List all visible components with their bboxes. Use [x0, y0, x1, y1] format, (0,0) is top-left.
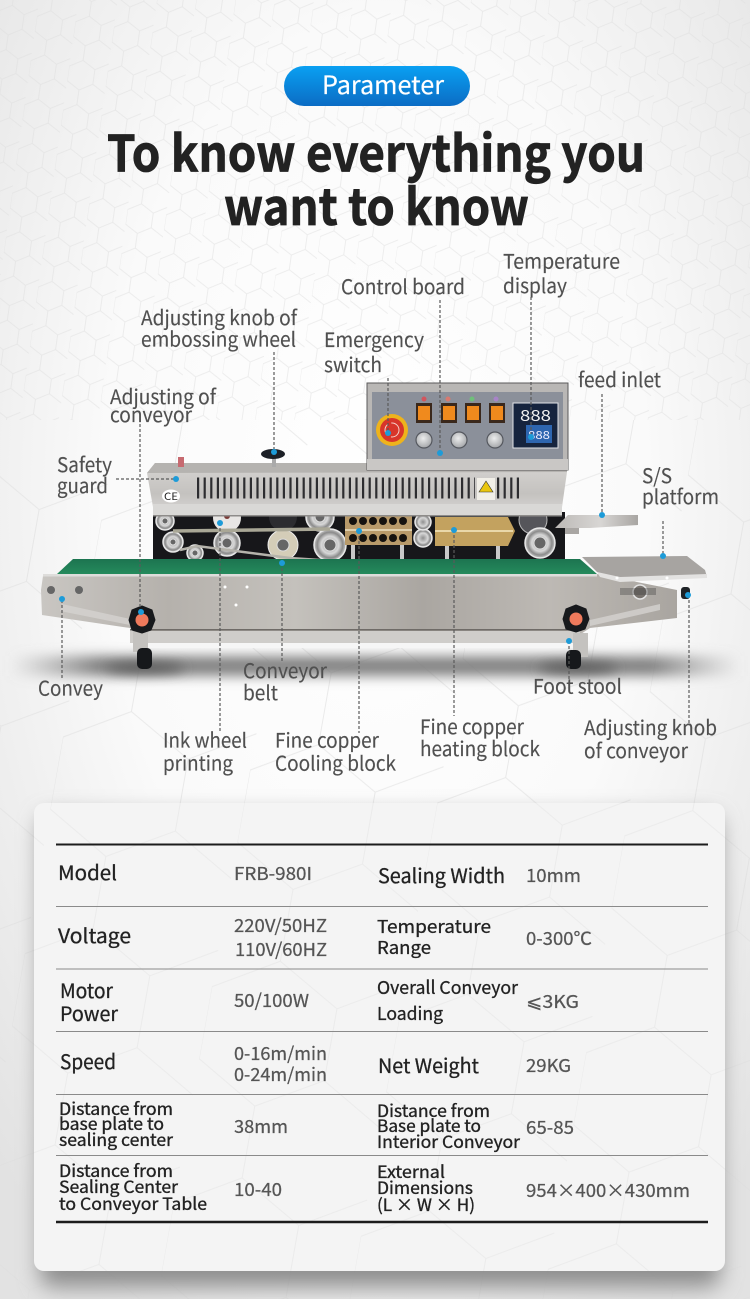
row: Speed / Net Weight [60, 1040, 571, 1087]
title: want to know [224, 168, 529, 240]
S/S platform [582, 556, 707, 582]
row: base plate distances: Distance from [59, 1095, 173, 1120]
row: base plate distances: sealing center [59, 1126, 173, 1151]
row: base plate distances: Interior Conveyor [377, 1128, 520, 1153]
CE mark [162, 488, 180, 503]
row: Speed / Net Weight: Net Weight [378, 1050, 479, 1079]
title: To know everything you [107, 114, 645, 186]
callout: Temperature display [503, 246, 620, 440]
badge: Parameter [284, 66, 470, 106]
row: Voltage / Temperature Range: 0-300℃ [526, 925, 592, 951]
callout: Adjusting knob of conveyor: of conveyor [584, 735, 688, 764]
callout: Safety guard: guard [57, 470, 108, 499]
copper heating block [435, 517, 515, 559]
row: Motor Power / Overall Conveyor Loading: Power [60, 998, 118, 1027]
back plate with wheels [153, 503, 565, 562]
callout: Control board: Control board [341, 271, 465, 300]
row: sealing center distance / external dimensions: (L × W × H) [377, 1191, 475, 1216]
table rules [56, 844, 708, 1222]
row: sealing center distance / external dimensions: Dimensions [377, 1174, 473, 1199]
row: base plate distances: 65-85 [526, 1114, 574, 1140]
row: Motor Power / Overall Conveyor Loading [60, 974, 579, 1027]
callout: Fine copper heating block: heating block [420, 733, 540, 762]
callout: Fine copper Cooling block: Fine copper [275, 724, 379, 754]
emergency stop [376, 414, 408, 446]
upper housing [147, 457, 567, 516]
row: sealing center distance / external dimensions: 10-40 [234, 1176, 282, 1202]
temperature display: 888 [520, 405, 551, 426]
callout: Foot stool [533, 638, 622, 700]
callout: Adjusting knob of embossing wheel: embossing wheel [141, 324, 296, 352]
row: base plate distances: Base plate to [377, 1112, 481, 1137]
row: base plate distances: Distance from [377, 1097, 490, 1122]
callout: Conveyor belt: Conveyor [243, 655, 327, 684]
callout: Adjusting knob of conveyor [584, 592, 717, 764]
conveyor belt [57, 559, 597, 574]
row: base plate distances: 38mm [234, 1113, 288, 1139]
callout: feed inlet [578, 364, 661, 518]
row: Voltage / Temperature Range [58, 912, 592, 962]
row: Motor Power / Overall Conveyor Loading: Overall Conveyor [377, 974, 519, 1000]
callout: Adjusting of conveyor [110, 381, 217, 615]
row: Motor Power / Overall Conveyor Loading: Motor [60, 975, 113, 1004]
row: sealing center distance / external dimensions: Sealing Center [59, 1173, 178, 1198]
callout: Conveyor belt: belt [243, 677, 278, 706]
callout: feed inlet: feed inlet [578, 364, 661, 393]
callout: Temperature display: display [503, 270, 568, 299]
conveyor body [41, 574, 690, 643]
machine floor shadow [10, 643, 740, 676]
row: Speed / Net Weight: 29KG [526, 1052, 571, 1078]
feed inlet plate [555, 515, 638, 534]
callout: Adjusting of conveyor: Adjusting of [110, 381, 217, 410]
callout: Emergency switch [324, 324, 425, 436]
callout: Safety guard: Safety [57, 449, 113, 478]
row: Model / Sealing Width: Model [58, 857, 117, 886]
row: Voltage / Temperature Range: Range [377, 934, 431, 960]
callout: S/S platform [642, 460, 719, 559]
callout: Emergency switch: Emergency [324, 324, 425, 353]
callout: Foot stool: Foot stool [533, 670, 622, 700]
row: Voltage / Temperature Range: Temperature [377, 913, 491, 939]
copper cooling block [345, 516, 412, 559]
right knob and foot [563, 605, 589, 669]
control box [367, 383, 568, 470]
row: sealing center distance / external dimensions: Distance from [59, 1157, 173, 1182]
callout: Fine copper heating block [420, 527, 540, 762]
row: Model / Sealing Width: 10mm [526, 862, 581, 888]
callout: Convey: Convey [38, 672, 104, 702]
panel shadow [40, 815, 720, 1287]
red safety button [178, 457, 184, 467]
row: Voltage / Temperature Range: 220V/50HZ [234, 912, 327, 938]
CE mark: CE [164, 488, 178, 503]
row: sealing center distance / external dimensions [59, 1157, 690, 1216]
left knob and foot [129, 606, 155, 669]
warning label [477, 478, 495, 500]
row: Model / Sealing Width: Sealing Width [378, 860, 505, 889]
row: sealing center distance / external dimensions: to Conveyor Table [59, 1190, 207, 1215]
callout: Adjusting knob of embossing wheel: Adjusting knob of [141, 302, 298, 331]
callout: Conveyor belt [243, 560, 327, 706]
callout: Fine copper heating block: Fine copper [420, 711, 524, 740]
machine: band sealer [41, 383, 707, 669]
callout: Ink wheel printing: Ink wheel [163, 724, 247, 754]
callout: S/S platform: platform [642, 481, 719, 510]
callout: Adjusting knob of embossing wheel [141, 302, 298, 455]
callout: Fine copper Cooling block: Cooling block [275, 748, 396, 776]
callout: Adjusting of conveyor: conveyor [110, 399, 192, 428]
row: base plate distances [59, 1095, 574, 1153]
row: Motor Power / Overall Conveyor Loading: Loading [377, 1000, 443, 1026]
row: Model / Sealing Width: FRB-980I [234, 860, 312, 886]
badge: Parameter: Parameter [322, 66, 444, 102]
vent slots [197, 478, 520, 498]
row: Motor Power / Overall Conveyor Loading: ⩽3KG [526, 988, 579, 1014]
row: Speed / Net Weight: Speed [60, 1046, 116, 1075]
callout: Convey [38, 596, 104, 702]
callout: Adjusting knob of conveyor: Adjusting knob [584, 712, 717, 741]
callout: Emergency switch: switch [324, 349, 382, 378]
callout: Safety guard [57, 449, 179, 499]
row: sealing center distance / external dimensions: 954×400×430mm [526, 1177, 690, 1203]
callout: Fine copper Cooling block [275, 528, 396, 776]
callout: Ink wheel printing: printing [163, 748, 233, 776]
temperature display [513, 403, 558, 448]
panel: specification table [34, 803, 725, 1271]
row: Model / Sealing Width [58, 857, 581, 889]
callout: Temperature display: Temperature [503, 246, 620, 274]
callout: S/S platform: S/S [642, 460, 672, 489]
embossing knob [261, 449, 285, 467]
row: Speed / Net Weight: 0-24m/min [234, 1061, 327, 1087]
row: Voltage / Temperature Range: 110V/60HZ [235, 936, 327, 962]
callout: Control board [341, 271, 465, 456]
row: Voltage / Temperature Range: Voltage [58, 920, 131, 949]
callout: Ink wheel printing [163, 520, 247, 776]
dial knobs [416, 432, 503, 448]
row: sealing center distance / external dimensions: External [377, 1158, 445, 1183]
row: base plate distances: base plate to [59, 1110, 164, 1135]
rocker switches [416, 396, 505, 423]
temperature display: 888 [528, 427, 550, 443]
row: Speed / Net Weight: 0-16m/min [234, 1040, 327, 1066]
title [107, 114, 645, 240]
row: Motor Power / Overall Conveyor Loading: 50/100W [234, 987, 309, 1013]
